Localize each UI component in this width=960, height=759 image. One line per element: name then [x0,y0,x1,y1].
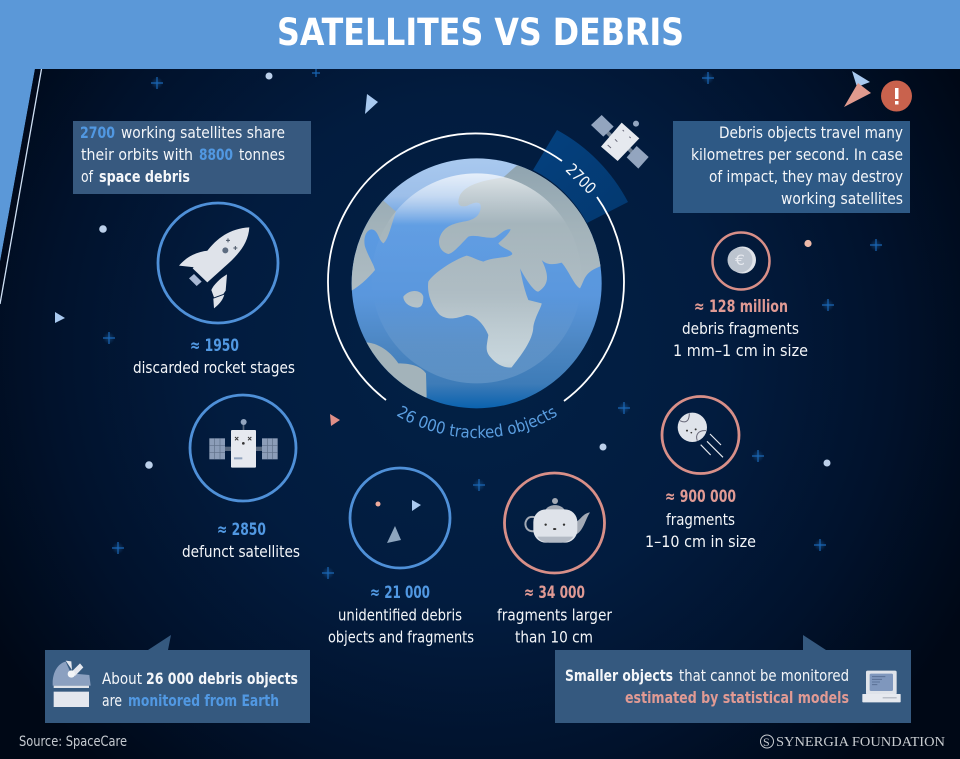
orbit sector: working satellites [533,130,628,223]
medium fragments item: 1–10 cm in size [645,532,756,551]
small fragments item: 1 mm–1 cm in size [673,341,808,360]
callout: statistical models: estimated by statistical models [625,688,849,707]
icon: rocket [158,203,278,323]
text box: impact warning: working satellites [781,189,903,208]
stat: 2850: ≈ 2850 [217,520,266,540]
icon: baseball [662,396,739,474]
icon: computer [862,671,901,702]
icon: teapot [504,473,604,573]
unidentified debris item: objects and fragments [328,628,474,646]
stat: 21 000: ≈ 21 000 [370,583,430,603]
icon: collision warning [844,71,912,112]
stat: 34 000: ≈ 34 000 [524,583,585,603]
icon: observatory [53,661,91,707]
icon: working satellite [591,115,649,169]
label: 26 000 tracked objects: 26 000 tracked objects [396,406,557,438]
text box: working satellites: space debris [99,167,190,186]
text box: working satellites: 8800 [199,145,233,164]
callout: monitored from Earth: About [102,669,142,688]
callout: monitored from Earth: 26 000 debris objects [146,669,298,688]
defunct satellites item [182,395,300,561]
stat: 1950: ≈ 1950 [190,336,239,356]
orbit ring [328,133,624,401]
title banner: SATELLITES VS DEBRIS [277,11,684,54]
caption: debris fragments [682,319,799,338]
callout: statistical models [555,635,911,723]
background stars [55,69,882,579]
medium fragments item [645,396,756,551]
foundation logo: SYNERGIA FOUNDATION [776,735,945,750]
icon: unidentified debris [350,468,450,568]
text box: working satellites: of [81,167,94,186]
text box: working satellites [73,121,311,194]
caption: defunct satellites [182,542,300,561]
large fragments item: than 10 cm [515,628,593,646]
text box: impact warning: Debris objects travel many [719,123,903,142]
text box: working satellites: 2700 [80,123,115,142]
text box: working satellites: working satellites share [121,123,285,142]
small fragments item [673,232,808,360]
callout: statistical models: that cannot be monitored [679,666,849,685]
text box: working satellites: their orbits with [81,145,193,164]
source credit: Source: SpaceCare [19,734,127,750]
text box: impact warning: of impact, they may destroy [709,167,903,186]
title banner [0,0,960,69]
globe with orbit ring [327,130,628,438]
callout: monitored from Earth [45,635,310,723]
rocket stages item [133,203,295,377]
text box: impact warning: kilometres per second. In case [691,145,903,164]
stat: 900 000: ≈ 900 000 [665,487,736,507]
icon: defunct satellite [190,395,296,501]
text box: working satellites: tonnes [239,145,285,164]
foundation logo: S [763,735,770,749]
corner stripe [0,69,42,304]
text box: impact warning [673,121,910,213]
large fragments item [497,473,612,646]
earth [352,158,602,408]
caption: fragments larger [497,606,612,624]
callout: statistical models: Smaller objects [565,666,673,685]
caption: unidentified debris [338,606,462,624]
caption: discarded rocket stages [133,358,295,377]
unidentified debris item [328,468,474,646]
stat: 128 million: ≈ 128 million [694,297,788,317]
callout: monitored from Earth: monitored from Earth [128,691,279,710]
caption: fragments [666,510,735,529]
label: 2700: 2700 [562,160,600,198]
icon: coin: € [735,253,745,269]
callout: monitored from Earth: are [102,691,122,710]
